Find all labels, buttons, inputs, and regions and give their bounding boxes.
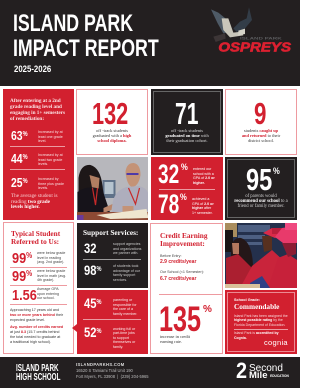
panel: 132 students (76, 89, 148, 155)
number 135%: 135 (159, 300, 201, 339)
stat 63%: least one grade (38, 135, 63, 139)
stat 52% (84, 324, 136, 349)
contact info: 16520 S Tamiami Trail Unit 190 (76, 368, 133, 373)
stat 44% (11, 151, 63, 166)
panel: typical student (3, 222, 74, 354)
panel intro text: grade reading level and (10, 104, 62, 110)
stat 45%: 45% (84, 295, 101, 311)
logo: second mile education: Second (249, 362, 283, 374)
stat 52%: working full or (113, 327, 135, 331)
stat 1.56 gpa: our school. (37, 296, 55, 300)
stat 32: 32 (84, 240, 96, 256)
stat 98%: 98% (84, 262, 101, 278)
logo: ospreys: ISLAND PARK (240, 35, 282, 40)
text: credits: at just 8.3 (15.7 credits behind (10, 330, 59, 334)
caption: off -track students (96, 128, 128, 133)
heading (11, 229, 60, 246)
stat 44%: levels. (38, 162, 48, 166)
caption (92, 128, 132, 143)
stat 45%: family member. (113, 312, 137, 316)
stat 25%: three plus grade (38, 182, 64, 186)
heading: Typical Student (11, 229, 60, 238)
before value: 2.9 credits/year (160, 259, 196, 265)
contact info: Fort Myers, FL 33908 | (239) 204-5965 (76, 374, 149, 379)
stat 99% reading: (avg. 2nd grade). (37, 260, 64, 264)
stat 45%: the care of a (113, 307, 133, 311)
before entry: Before Entry: (160, 254, 182, 258)
text: credits: the total needed to graduate at (10, 335, 60, 339)
caption (234, 193, 288, 209)
stat 32: support agencies (113, 242, 140, 246)
text: age: two or more years behind their (10, 313, 63, 317)
stat 78% (158, 189, 214, 219)
panel intro text: engaging in 1+ semesters (10, 110, 65, 116)
text: credits: Avg. number of credits earned (10, 325, 63, 329)
stat 32: we partner with. (113, 251, 138, 255)
heading: Support Services: (83, 228, 138, 237)
stat 45%: responsible for (113, 303, 137, 307)
caption (160, 334, 190, 344)
panel: credit earning (150, 223, 223, 354)
stat 32%: school with a (193, 172, 214, 176)
stat 52%: family. (113, 345, 123, 349)
stat 99% math: 99% (12, 268, 32, 285)
number 132: 132 (92, 96, 128, 131)
stat 78%: 78 (158, 189, 179, 219)
panel: 71 students (151, 89, 223, 155)
number 9: 9 (254, 96, 266, 131)
caption: increase in credit (160, 334, 190, 339)
average note (11, 193, 58, 210)
stat 98%: family support (113, 273, 135, 277)
stat 99% math: level in math (avg. (37, 274, 66, 278)
caption: off -track students (171, 128, 203, 133)
stat 63%: Increased by at (38, 130, 63, 134)
number 71: 71 (175, 96, 198, 131)
stat 45%: parenting or (113, 298, 132, 302)
stat 32%: % (181, 162, 188, 172)
school name: ISLAND PARK (16, 362, 59, 374)
stat 1.56 gpa (12, 287, 59, 304)
heading: Referred to Us: (11, 237, 59, 246)
heading: Improvement: (160, 239, 205, 248)
our school value: 6.7 credits/year (160, 276, 196, 282)
text: credits (10, 325, 63, 344)
title: IMPACT REPORT (13, 35, 159, 62)
caption: graduated with a high (93, 133, 131, 138)
accreditation: Island Park is accredited by (234, 331, 279, 335)
panel: support services (77, 223, 148, 288)
logo: ospreys (211, 8, 292, 54)
average note: levels higher. (11, 204, 40, 210)
stat 78%: higher after (192, 206, 211, 210)
caption: of parents would (245, 194, 277, 199)
stat 78%: 1+ semester. (192, 211, 213, 215)
panel intro text: After entering at a 2nd (10, 98, 61, 104)
stat 98%: advantage of our (113, 269, 140, 273)
caption: district school. (248, 138, 274, 143)
text: age (10, 308, 64, 322)
stat 63% (11, 128, 63, 143)
stat 98%: of students took (113, 264, 138, 268)
stat 32% (158, 159, 215, 189)
stat 25%: Increased by (38, 177, 59, 181)
stat 52%: themselves or (113, 340, 135, 344)
stat 32%: higher. (193, 181, 205, 185)
stat 52%: 52% (84, 324, 101, 340)
text: age: Approaching 17 years old and (10, 308, 59, 312)
description (234, 314, 288, 327)
caption: and returned to their (242, 133, 280, 138)
caption: students caught up (244, 128, 278, 133)
description: highest possible rating by the (234, 318, 283, 322)
stat 32%: 32 (158, 159, 179, 189)
caption: recommend our school to a (234, 199, 288, 204)
stat 32%: entered our (193, 167, 211, 171)
panel: family responsibilities (77, 290, 148, 354)
caption (165, 128, 209, 143)
stat 32 (84, 240, 142, 256)
caption: earning rate. (160, 339, 182, 344)
panel: credit earning: % (203, 304, 212, 314)
stat 44%: Increased by at (38, 153, 63, 157)
accreditation: Cognia. (234, 336, 247, 340)
arrow pointer (72, 324, 77, 332)
stat 99% reading: level in reading (37, 256, 61, 260)
panel intro text (10, 98, 65, 122)
logo: second mile education: 2 (236, 358, 247, 383)
panel: 95% parents: % (273, 166, 280, 176)
panel: 9 students (225, 89, 297, 155)
stat 78%: % (180, 192, 187, 202)
panel: remediation (3, 89, 74, 220)
stat 44%: 44% (11, 151, 28, 166)
text: age: expected grade level. (10, 318, 45, 322)
stat 99% reading (12, 250, 66, 267)
description: Florida Department of Education. (234, 323, 285, 327)
panel: school grade (225, 290, 297, 354)
stat 98% (84, 262, 140, 282)
contact info (76, 362, 149, 379)
caption: friend or family member. (237, 204, 285, 209)
panel: gpa stats (151, 157, 223, 220)
average note: reading two grade (11, 199, 50, 205)
heading (160, 231, 208, 248)
stat 1.56 gpa: Average GPA (37, 287, 59, 291)
stat 99% reading: 99% (12, 250, 32, 267)
stat 32%: GPA of 2.0 or (193, 176, 215, 180)
stat 25%: levels. (38, 186, 48, 190)
stat 44%: least two grade (38, 158, 62, 162)
number 95: 95 (246, 162, 272, 197)
panel intro text: of remediation: (10, 116, 44, 122)
stat 78%: achieved a (192, 197, 209, 201)
description: Island Park has been assigned the (234, 314, 288, 318)
panel: 95% parents (225, 157, 297, 220)
caption: their graduation cohort. (166, 138, 208, 143)
stat 99% math (12, 268, 66, 285)
heading: Credit Earning (160, 231, 208, 240)
title: ISLAND PARK (13, 10, 133, 37)
stat 99% math: were below grade (37, 269, 65, 273)
label: School Grade: (234, 298, 260, 302)
caption: school diploma. (97, 138, 127, 143)
stat 25%: 25% (11, 175, 28, 190)
stat 52%: to support (113, 336, 129, 340)
caption (242, 128, 280, 143)
grade: Commendable (234, 302, 279, 311)
stat 32: and organizations (113, 247, 141, 251)
stat 45% (84, 295, 138, 316)
footer (0, 357, 300, 388)
title (13, 10, 159, 62)
stat 78%: GPA of 2.0 or (192, 202, 214, 206)
school name: HIGH SCHOOL (16, 372, 60, 383)
school name (16, 362, 60, 383)
stat 52%: part-time jobs (113, 331, 135, 335)
average note: The average student is (11, 193, 58, 199)
photo: teacher and student (77, 157, 148, 220)
contact info: ISLANDPARKHS.COM (76, 362, 125, 367)
stat 25% (11, 175, 64, 190)
stat 98%: services. (113, 278, 127, 282)
logo: ospreys: OSPREYS (218, 39, 291, 54)
stat 1.56 gpa: upon entering (37, 292, 59, 296)
stat 99% math: 4th grade). (37, 278, 54, 282)
text: credits: a traditional high school). (10, 340, 51, 344)
header band (0, 0, 300, 86)
accreditation (234, 331, 279, 340)
photo: graduates (225, 223, 297, 288)
stat 63%: 63% (11, 128, 28, 143)
logo: second mile education (236, 358, 289, 383)
logo: cognia: cognia (264, 338, 288, 347)
stat 63%: level. (38, 139, 46, 143)
our school: Our School (<1 Semester): (160, 270, 204, 274)
year: 2025-2026 (14, 64, 51, 75)
logo: second mile education: Mile EDUCATION (249, 370, 289, 381)
stat 99% reading: were below grade (37, 251, 65, 255)
caption: graduated on time with (165, 133, 209, 138)
stat 1.56 gpa: 1.56 (12, 287, 37, 304)
